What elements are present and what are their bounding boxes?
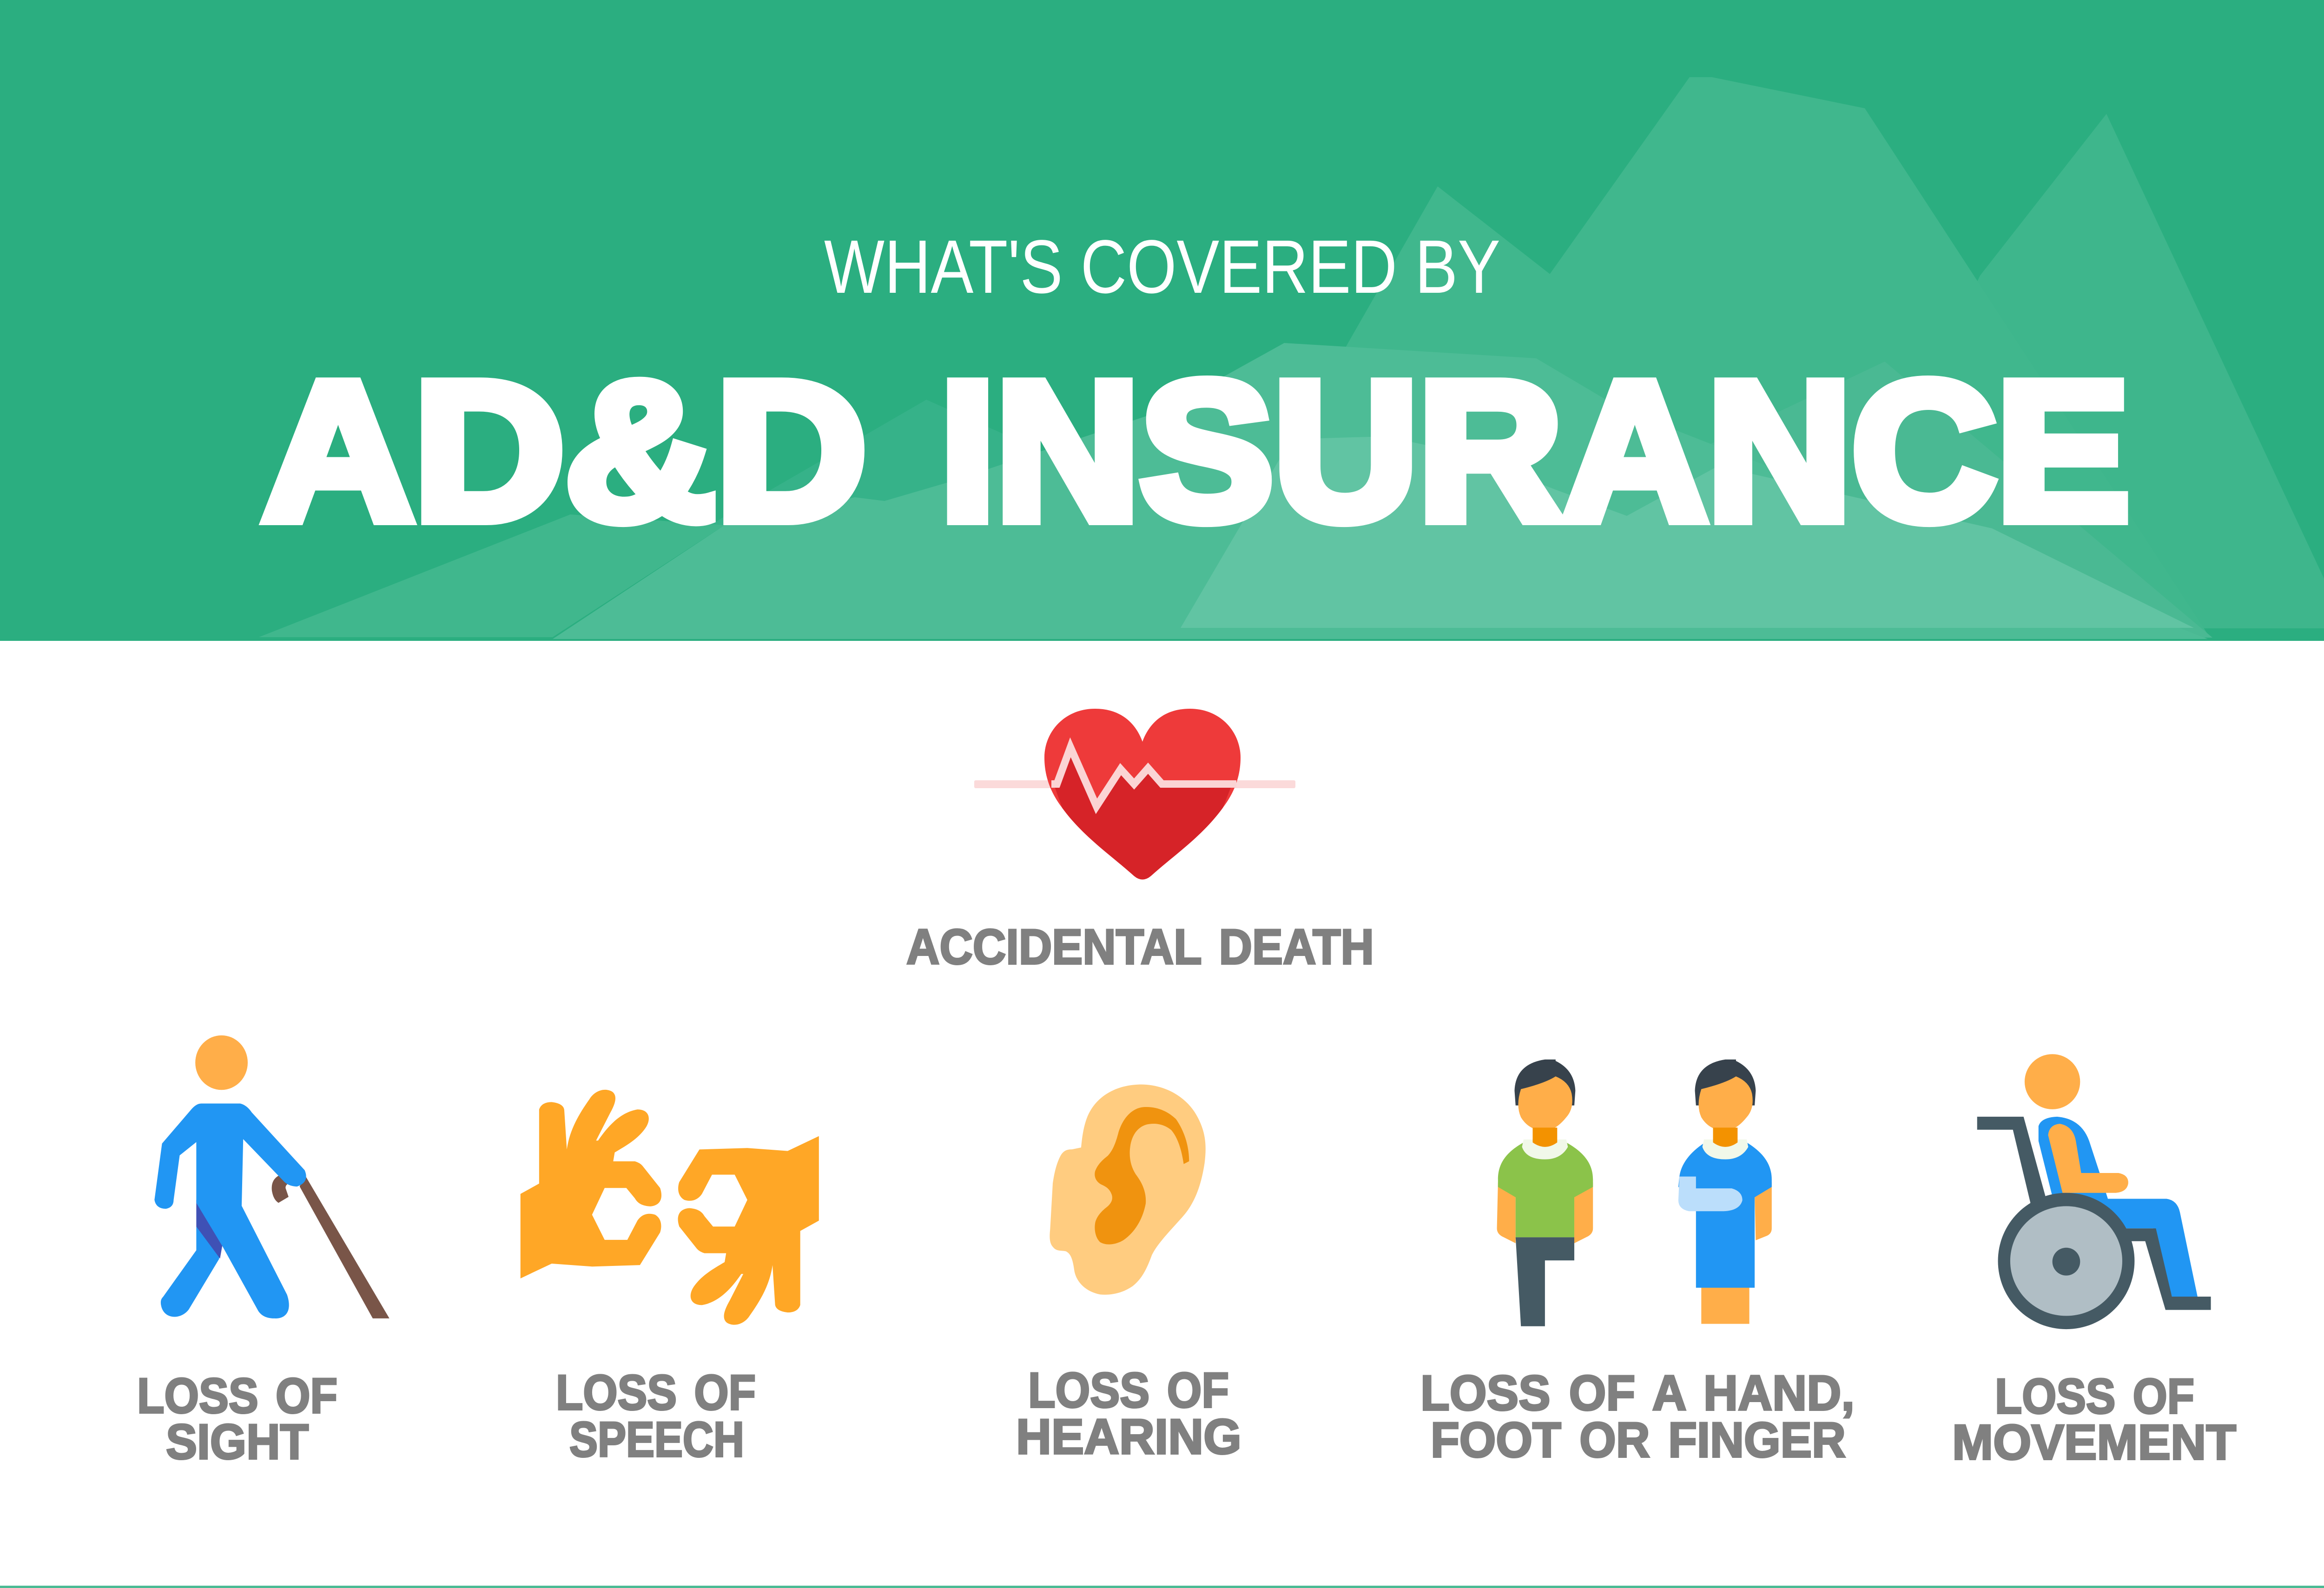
label: loss of a hand, foot or finger: LOSS OF A HAND, — [1420, 1365, 1855, 1421]
label: loss of hearing: LOSS OF — [1028, 1362, 1229, 1418]
label: loss of speech: LOSS OF — [556, 1364, 756, 1420]
icon: sign language hands — [521, 1090, 819, 1325]
header panel — [0, 0, 2324, 641]
label: loss of hearing — [1016, 1362, 1241, 1464]
icon: two people with injuries — [1497, 1060, 1772, 1326]
bottom rule — [0, 1586, 2324, 1588]
label: loss of speech — [556, 1364, 756, 1467]
label: loss of sight: SIGHT — [166, 1414, 309, 1469]
label: loss of sight — [137, 1368, 337, 1469]
label: loss of movement: LOSS OF — [1995, 1368, 2194, 1424]
label: loss of a hand, foot or finger — [1420, 1365, 1855, 1468]
label: loss of movement — [1952, 1368, 2236, 1470]
label: loss of movement: MOVEMENT — [1952, 1414, 2236, 1470]
label: loss of speech: SPEECH — [569, 1411, 744, 1467]
label: loss of hearing: HEARING — [1016, 1409, 1241, 1464]
label: loss of a hand, foot or finger: FOOT OR FINGER — [1431, 1412, 1846, 1468]
icon: ear — [1050, 1085, 1206, 1295]
mountains background — [259, 77, 2324, 639]
title: INSURANCE — [940, 341, 2130, 561]
person: arm in cast — [1678, 1060, 1772, 1324]
icon: heart with pulse line — [974, 709, 1295, 879]
person: missing leg — [1497, 1060, 1593, 1326]
label: loss of sight: LOSS OF — [137, 1368, 337, 1423]
title: AD&D — [263, 341, 867, 561]
icon: person in wheelchair — [1977, 1054, 2211, 1329]
subtitle: WHAT'S COVERED BY — [824, 224, 1500, 309]
title — [263, 341, 2130, 561]
icon: person with cane — [154, 1035, 390, 1318]
label: accidental death: ACCIDENTAL DEATH — [906, 919, 1374, 975]
